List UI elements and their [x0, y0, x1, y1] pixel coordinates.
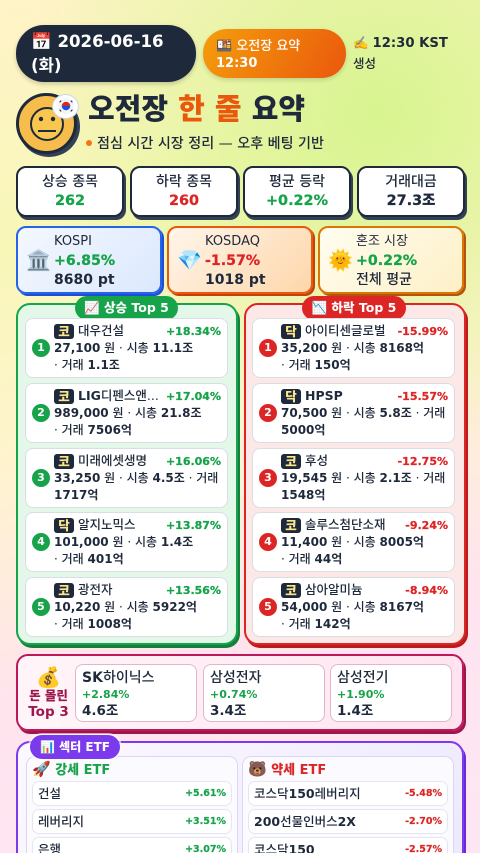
loser 1: 1 — [264, 341, 272, 354]
loser 4: 11,400 원 · 시총 8005억 — [281, 535, 424, 549]
loser 2: 70,500 원 · 시총 5.8조 · 거래 — [281, 406, 445, 420]
gainer 3: 미래에셋생명 — [78, 453, 147, 468]
mascot icon — [16, 93, 80, 157]
index: mixed market: +0.22% — [356, 253, 417, 269]
money card 2: +0.74% — [210, 688, 257, 701]
money flow label — [28, 665, 69, 720]
date pill — [16, 25, 196, 82]
gainer 5: 코 — [58, 583, 70, 598]
gainers heading — [75, 296, 178, 320]
gainer 4: · 거래 401억 — [54, 552, 124, 566]
weak ETF 1: 코스닥150레버리지 — [254, 786, 361, 801]
gainer 1: 코 — [58, 324, 70, 339]
index: mixed market — [318, 226, 464, 294]
gainer 1: 1 — [37, 341, 45, 354]
kpi: turnover: 27.3조 — [387, 193, 435, 209]
kpi: falling: 260 — [169, 193, 199, 209]
gainer 3: +16.06% — [166, 455, 221, 468]
weak ETF 2 — [248, 809, 448, 834]
loser 2: HPSP — [305, 388, 343, 403]
strong ETF 3 — [32, 837, 232, 853]
weak ETF 1 — [248, 781, 448, 806]
kpi: rising: 상승 종목 — [42, 174, 98, 190]
session pill: 🍱 오전장 요약 — [216, 39, 300, 54]
loser 4: -9.24% — [405, 519, 448, 532]
subtitle bullet — [86, 140, 92, 146]
money card 1: SK하이닉스 — [82, 670, 154, 686]
panel: sector ETF — [16, 741, 464, 853]
loser 1: 아이티센글로벌 — [305, 323, 386, 338]
loser 5: 54,000 원 · 시총 8167억 — [281, 600, 424, 614]
gainer 5: 10,220 원 · 시총 5922억 — [54, 600, 197, 614]
loser 5: · 거래 142억 — [281, 617, 351, 631]
kpi row — [16, 166, 467, 220]
gainer 1: 대우건설 — [78, 323, 124, 338]
loser 4: 코 — [285, 518, 297, 533]
strong ETF 2: 레버리지 — [38, 814, 84, 829]
loser 4 — [252, 512, 455, 572]
index: KOSPI — [16, 226, 162, 294]
gainer 1: · 거래 1.1조 — [54, 358, 120, 372]
gainer 5 — [25, 577, 228, 637]
loser 5 — [252, 577, 455, 637]
kpi: falling: 하락 종목 — [156, 174, 212, 190]
gainer 2: · 거래 7506억 — [54, 423, 132, 437]
money card 3 — [330, 664, 452, 722]
index: KOSDAQ: KOSDAQ — [205, 234, 260, 249]
ETF heading — [30, 735, 120, 759]
money flow label: 돈 몰린 — [29, 688, 68, 703]
panel: money flow top 3 — [16, 654, 464, 731]
date pill: (화) — [31, 56, 61, 75]
loser 2: 닥 — [285, 389, 297, 404]
generated time: ✍️ 12:30 KST — [353, 35, 448, 51]
gainer 2: LIG디펜스앤... — [78, 388, 159, 403]
gainer 1 — [25, 318, 228, 378]
ETF heading: 📊 섹터 ETF — [40, 740, 110, 754]
money card 3: +1.90% — [337, 688, 384, 701]
weak ETF heading: 🐻 약세 ETF — [248, 760, 326, 778]
kpi: falling — [130, 166, 238, 217]
loser 3: 1548억 — [281, 488, 325, 502]
weak ETF 3 — [248, 837, 448, 853]
gainer 3: 3 — [37, 471, 45, 484]
loser 3: 3 — [264, 471, 272, 484]
loser 1: 35,200 원 · 시총 8168억 — [281, 341, 424, 355]
money card 3: 1.4조 — [337, 703, 373, 719]
gainer 5: 5 — [37, 600, 45, 613]
weak ETF panel — [242, 756, 454, 853]
loser 2: 5000억 — [281, 423, 325, 437]
loser 2 — [252, 383, 455, 443]
panel: losers — [244, 303, 466, 645]
gainer 5: 광전자 — [78, 582, 113, 597]
gainer 2: 989,000 원 · 시총 21.8조 — [54, 406, 202, 420]
gainer 4 — [25, 512, 228, 572]
loser 3: -12.75% — [398, 455, 448, 468]
weak ETF 1: -5.48% — [405, 788, 442, 799]
kpi: rising: 262 — [55, 193, 85, 209]
index: KOSPI: +6.85% — [54, 253, 115, 269]
strong ETF 1 — [32, 781, 232, 806]
strong ETF 1: 건설 — [38, 786, 61, 801]
loser 1: 닥 — [285, 324, 297, 339]
money card 3: 삼성전기 — [337, 670, 389, 686]
weak ETF 2: -2.70% — [405, 816, 442, 827]
gainer 5: · 거래 1008억 — [54, 617, 132, 631]
index: KOSPI: 8680 pt — [54, 272, 115, 288]
loser 1 — [252, 318, 455, 378]
index: KOSDAQ: 💎 — [177, 248, 202, 272]
kpi: average — [243, 166, 351, 217]
kpi: turnover — [357, 166, 465, 217]
money card 1 — [75, 664, 197, 722]
gainer 4: 101,000 원 · 시총 1.4조 — [54, 535, 193, 549]
loser 5: 5 — [264, 600, 272, 613]
strong ETF 2: +3.51% — [185, 816, 226, 827]
gainer 3: 1717억 — [54, 488, 98, 502]
loser 5: 삼아알미늄 — [305, 582, 363, 597]
kpi: average: +0.22% — [266, 193, 328, 209]
index: KOSPI: KOSPI — [54, 234, 92, 249]
index: mixed market: 🌞 — [328, 248, 353, 272]
strong ETF 1: +5.61% — [185, 788, 226, 799]
money card 1: +2.84% — [82, 688, 129, 701]
money card 1: 4.6조 — [82, 703, 118, 719]
title: 오전장 한 줄 요약 — [88, 92, 305, 126]
strong ETF heading: 🚀 강세 ETF — [32, 760, 110, 778]
index: mixed market: 혼조 시장 — [356, 234, 408, 249]
session pill: 12:30 — [216, 56, 257, 71]
gainer 1: 27,100 원 · 시총 11.1조 — [54, 341, 193, 355]
weak ETF 2: 200선물인버스2X — [254, 814, 356, 829]
loser 1: -15.99% — [398, 325, 448, 338]
loser 3: 후성 — [305, 453, 328, 468]
losers heading: 📉 하락 Top 5 — [312, 300, 396, 315]
gainer 2: 2 — [37, 406, 45, 419]
index: KOSDAQ: -1.57% — [205, 253, 260, 269]
strong ETF 2 — [32, 809, 232, 834]
gainer 3 — [25, 448, 228, 508]
gainer 4: 닥 — [58, 518, 70, 533]
money card 2: 3.4조 — [210, 703, 246, 719]
money flow label: Top 3 — [28, 704, 69, 720]
loser 2: 2 — [264, 406, 272, 419]
panel: gainers — [16, 303, 238, 645]
session pill — [203, 29, 346, 78]
money card 2 — [203, 664, 325, 722]
gainer 5: +13.56% — [166, 584, 221, 597]
generated time: 생성 — [353, 56, 376, 71]
index: KOSPI: 🏛️ — [26, 248, 51, 272]
loser 2: -15.57% — [398, 390, 448, 403]
loser 3 — [252, 448, 455, 508]
gainer 2: +17.04% — [166, 390, 221, 403]
loser 1: · 거래 150억 — [281, 358, 351, 372]
gainer 2 — [25, 383, 228, 443]
gainers heading: 📈 상승 Top 5 — [84, 300, 169, 315]
losers heading — [302, 296, 406, 320]
money flow label: 💰 — [36, 665, 61, 689]
kpi: average: 평균 등락 — [269, 174, 325, 190]
gainer 1: +18.34% — [166, 325, 221, 338]
index: KOSDAQ: 1018 pt — [205, 272, 266, 288]
loser 5: -8.94% — [405, 584, 448, 597]
date pill: 📅 2026-06-16 — [31, 32, 164, 51]
loser 4: · 거래 44억 — [281, 552, 342, 566]
money card 2: 삼성전자 — [210, 670, 262, 686]
gainer 4: +13.87% — [166, 519, 221, 532]
loser 3: 19,545 원 · 시총 2.1조 · 거래 — [281, 471, 445, 485]
generated time — [353, 35, 448, 71]
loser 3: 코 — [285, 454, 297, 469]
loser 4: 솔루스첨단소재 — [305, 517, 386, 532]
gainer 3: 코 — [58, 454, 70, 469]
gainer 4: 4 — [37, 535, 45, 548]
subtitle: 점심 시간 시장 정리 — 오후 베팅 기반 — [97, 136, 324, 152]
kpi: turnover: 거래대금 — [385, 174, 437, 190]
strong ETF panel — [26, 756, 238, 853]
gainer 4: 알지노믹스 — [78, 517, 136, 532]
loser 4: 4 — [264, 535, 272, 548]
gainer 3: 33,250 원 · 시총 4.5조 · 거래 — [54, 471, 218, 485]
gainer 2: 코 — [58, 389, 70, 404]
index: KOSDAQ — [167, 226, 313, 294]
loser 5: 코 — [285, 583, 297, 598]
index: mixed market: 전체 평균 — [356, 272, 412, 288]
kpi: rising — [16, 166, 124, 217]
